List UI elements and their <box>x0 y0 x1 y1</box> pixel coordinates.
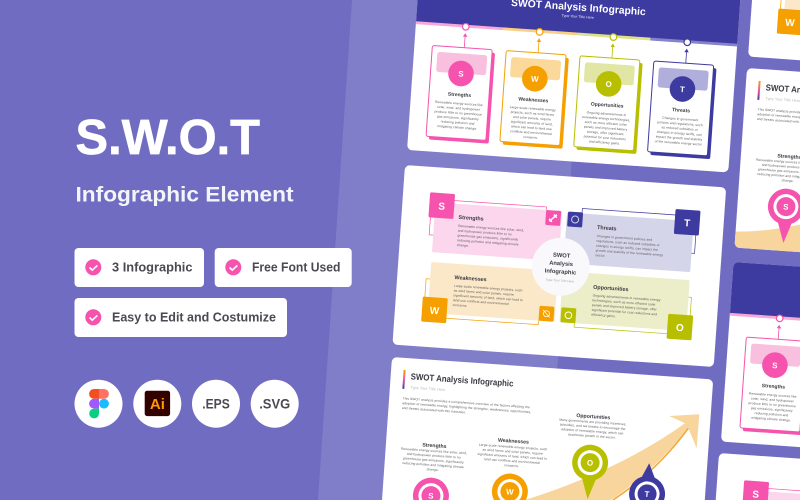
center circle: Analysis <box>549 261 573 268</box>
header band <box>416 0 741 45</box>
panel: SWOT quadrant slide <box>392 165 726 367</box>
quadrant: Threats: T <box>684 218 691 230</box>
item: Weaknesses: significant amounts of land, which can lead to <box>477 452 547 461</box>
card: Opportunities: O <box>605 80 612 89</box>
card: Strengths: S <box>458 69 465 79</box>
quadrant: Weaknesses: Weaknesses <box>454 275 487 283</box>
panel: partial cards slide right: S <box>772 361 779 370</box>
feature chip: Easy to Edit and Costumize: Easy to Edit and Costumize <box>112 311 276 325</box>
quadrant: Weaknesses: land use conflicts and environmental <box>453 298 509 306</box>
card: Threats: of the renewable energy sector. <box>655 139 703 147</box>
quadrant: Threats: regulations, such as reduced subsidies or <box>596 239 661 247</box>
intro paragraph: and threats associated with this transition. <box>402 406 466 414</box>
quadrant: Opportunities: panels and improved battery storage, offer <box>592 303 658 312</box>
icon: EPS format: .EPS <box>202 396 230 412</box>
quadrant: Strengths: greenhouse gas emissions, significantly <box>457 233 519 242</box>
item: Opportunities: Many governments are providing incentives, <box>559 418 627 426</box>
panel: partial cards slide right: Renewable energy sources like <box>749 391 797 399</box>
panel: partial roadmap slide right: Type Your Title Here <box>765 96 800 103</box>
quadrant: Threats: Changes in government policies and <box>597 234 652 242</box>
intro paragraph: adoption of renewable energy, highlighting the strengths, weaknesses, opportunities, <box>402 401 531 414</box>
quadrant: Strengths: Renewable energy sources like solar, wind, <box>458 224 524 232</box>
icon: SVG format: .SVG <box>259 396 290 412</box>
card: Strengths: Strengths <box>448 91 472 99</box>
panel: SWOT roadmap slide <box>379 357 713 500</box>
card: Weaknesses: and solar panels, require <box>513 115 551 122</box>
icon: SVG format <box>251 380 299 428</box>
quadrant: Weaknesses <box>421 262 558 331</box>
icon: Figma <box>74 380 122 428</box>
intro paragraph <box>402 396 532 419</box>
quadrant: Weaknesses: significant amounts of land, which can lead to <box>453 293 523 302</box>
panel: partial cards slide right: Strengths <box>762 383 785 391</box>
card: Opportunities: storage, offer significant <box>587 130 624 136</box>
quadrant: Weaknesses: concerns. <box>453 303 468 308</box>
quadrant: Opportunities: Ongoing advancements in renewable energy <box>593 293 661 302</box>
icon: Adobe Illustrator: Ai <box>150 396 165 413</box>
feature chip: 3 Infographic <box>74 248 204 287</box>
card: Weaknesses: projects, such as wind farms <box>511 110 555 117</box>
panel: partial cards slide right: solar, wind, and hydropower <box>751 396 795 403</box>
center circle: Type Your Title Here <box>545 278 575 284</box>
item: Weaknesses: as wind farms and solar panels, require <box>482 448 543 456</box>
quadrant: Opportunities: Opportunities <box>593 285 629 293</box>
card: Weaknesses: significant amounts of land, <box>511 120 553 126</box>
card: Opportunities: potential for cost reductions <box>584 134 626 141</box>
feature chip: Free Font Used <box>215 248 352 287</box>
panel: SWOT cards slide <box>407 0 741 172</box>
card: Opportunities: Opportunities <box>591 101 624 110</box>
panel: partial quadrant slide top right: W <box>785 18 796 29</box>
intro paragraph: This SWOT analysis provides a comprehensive overview of the factors affecting the <box>403 396 530 409</box>
card: Strengths <box>426 21 497 144</box>
item: Weaknesses: concerns. <box>504 463 519 468</box>
center circle: SWOT <box>553 253 571 260</box>
quadrant: Weaknesses: W <box>429 306 440 317</box>
card: Opportunities <box>573 32 645 154</box>
panel: partial cards slide right: produce little to no greenhouse <box>748 401 796 408</box>
card: Strengths: solar, wind, and hydropower <box>437 105 481 112</box>
quadrant: Strengths: reducing pollution and mitigating climate <box>457 238 519 247</box>
quadrant: Opportunities: efficiency gains. <box>591 313 616 318</box>
feature chip: Easy to Edit and Costumize <box>74 298 287 337</box>
card: Strengths: mitigating climate change. <box>437 124 477 131</box>
card: Threats <box>647 37 718 159</box>
card: Strengths: reducing pollution and <box>441 119 475 126</box>
panel: partial roadmap slide right: S <box>783 202 790 212</box>
item: Weaknesses: Large-scale renewable energy projects, such <box>479 443 547 451</box>
slide subheading: Type Your Title Here <box>410 385 446 392</box>
subtitle: Infographic Element <box>76 184 294 207</box>
accent bar <box>402 370 406 389</box>
quadrant: Opportunities: significant potential for cost reductions and <box>592 308 657 316</box>
item: Strengths: Renewable energy sources like solar, wind, <box>401 447 467 455</box>
card: Threats: Changes in government <box>662 116 699 122</box>
arrow: growth <box>525 414 699 500</box>
feature chip: 3 Infographic: 3 Infographic <box>112 261 193 275</box>
item: Weaknesses: Weaknesses <box>498 438 529 446</box>
quadrant: Strengths <box>426 192 563 261</box>
item: Threats pin: T <box>644 490 650 499</box>
card: Opportunities: such as more efficient solar <box>585 120 628 127</box>
timeline stripe <box>416 21 737 47</box>
item: Strengths: and hydropower produce little to no <box>407 452 461 460</box>
card: Threats: Threats <box>672 107 690 114</box>
quadrant: Weaknesses: as wind farms and solar panels, require <box>454 289 514 297</box>
card: Weaknesses: Weaknesses <box>518 96 549 105</box>
item: Weaknesses: W <box>506 487 514 497</box>
card: Weaknesses: conflicts and environmental <box>510 129 552 136</box>
card: Opportunities: renewable energy technologies, <box>582 115 631 122</box>
quadrant: Strengths: and hydropower produce little to no <box>458 229 512 236</box>
card: Threats: impact the growth and stability <box>656 134 703 142</box>
quadrant: Opportunities: O <box>675 323 684 334</box>
card: Threats: as reduced subsidies or <box>661 125 699 132</box>
item: Strengths: change. <box>427 467 439 472</box>
card: Weaknesses <box>500 26 571 149</box>
panel: partial quadrant slide top right <box>748 0 800 79</box>
quadrant: Strengths: S <box>438 201 446 213</box>
item: Opportunities: O <box>587 458 594 468</box>
card: Strengths: Renewable energy sources like <box>435 100 483 107</box>
item: Weaknesses <box>474 436 548 500</box>
header subtitle: Type Your Title Here <box>561 14 594 20</box>
card: Strengths: gas emissions, significantly <box>437 114 479 121</box>
title: S.W.O.T <box>76 110 260 165</box>
feature chip: Free Font Used: Free Font Used <box>252 261 340 275</box>
quadrant: Threats: growth and stability of the renewable energy <box>596 248 664 257</box>
card: Weaknesses: concerns. <box>523 135 538 140</box>
item: Opportunities: adoption of renewable energy, which can <box>561 427 624 436</box>
slide heading: SWOT Analysis Infographic <box>410 371 514 389</box>
quadrant: Threats: Threats <box>597 225 617 232</box>
item: Opportunities: Opportunities <box>576 413 611 421</box>
panel: partial cards slide right: gas emissions, significantly <box>751 406 793 413</box>
panel: partial roadmap slide right <box>734 68 800 270</box>
quadrant: Strengths: change. <box>457 243 469 248</box>
quadrant: Weaknesses: Large-scale renewable energy projects, such <box>454 284 523 292</box>
center circle <box>530 236 592 298</box>
card: Weaknesses: W <box>531 74 539 84</box>
card: Weaknesses: Large-scale renewable energy <box>510 105 556 112</box>
item: Strengths: Strengths <box>422 442 447 450</box>
item: Strengths <box>395 441 468 500</box>
icon: EPS format <box>192 380 240 428</box>
panel: partial cards slide right: mitigating climate change. <box>751 416 791 422</box>
panel: partial quadrant slide bottom right <box>706 453 800 500</box>
quadrant: Threats: sector. <box>595 253 606 258</box>
quadrant: Strengths: Strengths <box>458 215 484 223</box>
card: Strengths: produce little to no greenhouse <box>434 109 482 117</box>
item: Opportunities <box>554 412 627 500</box>
item: Opportunities: accelerate growth in the sector. <box>568 432 616 440</box>
panel: partial roadmap slide right: change. <box>782 178 794 183</box>
panel: partial cards slide right <box>721 262 800 464</box>
card: Threats: changes in energy tariffs, can <box>657 130 702 137</box>
center circle: Infographic <box>545 268 577 277</box>
item: Weaknesses: land use conflicts and environmental <box>484 457 540 465</box>
quadrant: Threats: changes in energy tariffs, can impact the <box>596 244 658 252</box>
card: Opportunities: Ongoing advancements in <box>587 110 627 117</box>
card: Opportunities: panels and improved battery <box>584 125 628 132</box>
item: Opportunities: subsidies, and tax breaks to encourage the <box>560 422 626 431</box>
quadrant: Threats <box>564 201 701 273</box>
item: Threats pin <box>628 462 667 500</box>
quadrant: Opportunities <box>559 271 696 340</box>
item: Strengths: greenhouse gas emissions, significantly <box>403 456 464 464</box>
icon: Adobe Illustrator <box>133 380 181 428</box>
card: Threats: T <box>680 85 685 94</box>
card: Opportunities: and efficiency gains. <box>589 139 620 146</box>
quadrant: Opportunities: technologies, such as more efficient solar <box>592 298 657 307</box>
card: Weaknesses: which can lead to land use <box>511 124 552 131</box>
item: Strengths: reducing pollution and mitigating climate <box>402 461 464 469</box>
card: Threats: policies and regulations, such <box>657 120 703 127</box>
panel: partial cards slide right: reducing pollution and <box>754 411 789 417</box>
